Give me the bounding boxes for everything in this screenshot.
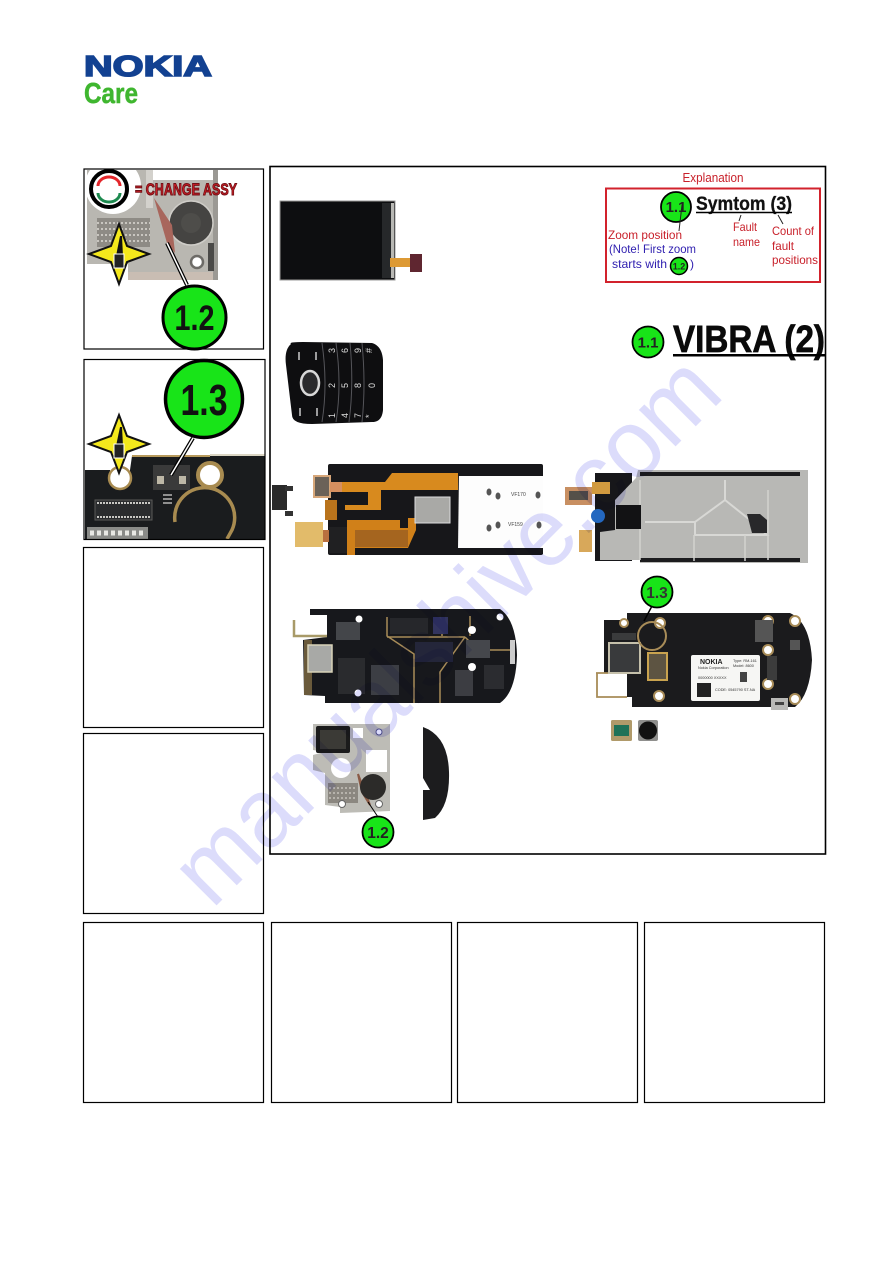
USB connector	[771, 698, 788, 710]
explanation legend: (Note! First zoom	[609, 242, 696, 256]
panel: zoom 1.2 change assembly	[84, 158, 264, 349]
explanation legend: positions	[772, 253, 818, 267]
keypad: 5	[340, 383, 350, 388]
marker 1.2: 1.2	[174, 299, 214, 338]
connector	[95, 500, 152, 520]
explanation legend: starts with	[612, 257, 667, 271]
marker 1.2	[362, 816, 394, 848]
keypad: 7	[353, 413, 363, 418]
keypad: 1	[327, 413, 337, 418]
vibra motor	[169, 201, 213, 245]
empty panel bottom 4	[644, 922, 824, 1102]
empty panel left 3	[84, 548, 264, 728]
explanation legend: 1.2	[673, 262, 685, 272]
flex wire	[154, 198, 175, 253]
logo: Nokia Care	[84, 51, 212, 110]
explanation legend: name	[733, 235, 760, 249]
PCB, top side	[294, 609, 517, 703]
icon: change assembly arrows	[85, 158, 141, 214]
switch component	[153, 465, 190, 490]
slide frame, back	[565, 470, 808, 563]
keypad: 8	[353, 383, 363, 388]
keypad: 2	[327, 383, 337, 388]
keypad: 0	[367, 383, 377, 388]
connectors	[314, 476, 330, 497]
keypad: 3	[327, 348, 337, 353]
explanation legend: Zoom position	[608, 228, 682, 242]
PCB, bottom side: 1.3	[646, 585, 668, 602]
product label: 0000000 XXXXX	[698, 676, 727, 680]
explanation legend: fault	[772, 239, 795, 253]
watermark: manualshive.com	[149, 333, 741, 925]
icon: ESD star	[89, 415, 149, 473]
keypad: 9	[353, 348, 363, 353]
gold ring	[175, 488, 235, 539]
pointer line	[167, 243, 187, 285]
mounting holes	[109, 467, 131, 489]
LCD module	[280, 201, 422, 280]
PCB, bottom side	[596, 576, 812, 710]
curved cover	[423, 727, 449, 820]
frame	[328, 464, 543, 555]
small components	[611, 720, 658, 741]
marker 1.3	[166, 360, 242, 438]
product label: CODE: 0545790 ST-NA	[715, 688, 756, 692]
product label	[691, 655, 760, 701]
explanation legend: 1.1	[666, 199, 686, 216]
flex	[338, 473, 458, 510]
product label: Model: 8600	[733, 664, 754, 668]
marker 1.3: 1.3	[180, 376, 228, 425]
empty panel bottom 1	[84, 922, 264, 1102]
label: change assy: = CHANGE ASSY	[135, 180, 237, 199]
chips	[338, 658, 365, 694]
panel: zoom 1.3 PCB detail	[84, 360, 265, 540]
white board detail	[486, 488, 542, 532]
panel: main exploded view	[270, 166, 826, 854]
empty panel left 4	[84, 734, 264, 914]
screw hole	[191, 256, 203, 268]
small camera part	[272, 485, 287, 510]
keypad: #	[364, 348, 374, 353]
empty panel bottom 3	[458, 922, 638, 1102]
shield can	[308, 645, 332, 672]
icon: ESD star	[89, 224, 149, 284]
heading: VIBRA (2): 1.1	[638, 334, 658, 352]
marker 1.3	[644, 606, 652, 621]
explanation legend: )	[690, 257, 694, 271]
slide frame with flex, front: VF159	[508, 522, 523, 528]
nav ring	[301, 371, 319, 395]
logo: Nokia Care: NOKIA	[84, 51, 212, 83]
pointer line	[171, 438, 193, 475]
metal shield	[415, 497, 450, 523]
logo: Nokia Care: Care	[84, 78, 138, 110]
vibra assembly: 1.2	[367, 825, 389, 842]
empty panel bottom 2	[272, 922, 452, 1102]
product label: Type: RM-161	[733, 659, 757, 663]
slide frame with flex, front	[272, 464, 543, 555]
vibra assembly	[313, 724, 394, 848]
explanation legend: Symtom (3)	[696, 194, 792, 215]
heading: VIBRA (2): VIBRA (2)	[673, 319, 825, 361]
slide frame with flex, front: VF170	[511, 492, 526, 498]
marker 1.2	[163, 286, 226, 349]
product label: Nokia Corporation	[698, 666, 729, 670]
explanation legend	[606, 171, 820, 282]
keypad: *	[364, 414, 374, 418]
shield and SIM contacts	[609, 643, 640, 673]
keypad: 4	[340, 413, 350, 418]
explanation legend: Count of	[772, 224, 815, 238]
keypad: 6	[340, 348, 350, 353]
explanation legend: Fault	[733, 220, 758, 234]
keypad	[286, 342, 383, 424]
product label: NOKIA	[700, 659, 723, 666]
mesh pad	[97, 218, 150, 247]
explanation legend: Explanation	[682, 171, 744, 185]
